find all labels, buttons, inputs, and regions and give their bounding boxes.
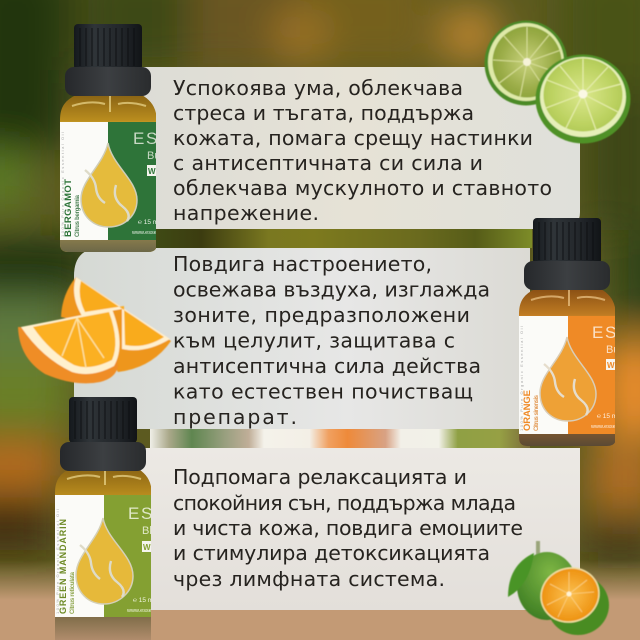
- text block: orange benefits: към целулит, защитава с: [173, 328, 455, 352]
- bottle: orange: E: [592, 323, 603, 342]
- panel: green mandarin text background: [130, 448, 580, 610]
- text block: bergamot benefits: напрежение.: [173, 201, 319, 225]
- text block: orange benefits: освежава въздуха, изглажда: [173, 278, 490, 302]
- text block: green mandarin benefits: [173, 465, 523, 591]
- bottle: green mandarin: E: [128, 504, 139, 523]
- text block: orange benefits: като естествен почистващ: [173, 380, 473, 404]
- text block: bergamot benefits: стреса и тъгата, поддържа: [173, 101, 474, 125]
- text block: bergamot benefits: кожата, помага срещу настинки: [173, 126, 533, 150]
- bottle: orange: ℮ 15 ml: [597, 413, 619, 420]
- text block: orange benefits: зоните, предразположени: [173, 303, 470, 327]
- icon: green mandarin: [508, 541, 609, 635]
- text block: orange benefits: антисептична сила действа: [173, 354, 481, 378]
- panel: bergamot text background: [130, 67, 580, 229]
- text block: orange benefits: препарат.: [173, 405, 297, 429]
- text block: bergamot benefits: с антисептичната си сила и: [173, 151, 483, 175]
- bottle: bergamot: S: [146, 129, 157, 148]
- bottle: orange: Bu: [606, 344, 619, 356]
- bottle: bergamot: www.essence: [131, 230, 166, 236]
- bottle: orange: Citrus sinensis: [534, 394, 540, 431]
- bottle: bergamot: [60, 24, 166, 252]
- bottle: bergamot: ℮ 15 ml: [138, 219, 160, 226]
- bottle: green mandarin: GREEN MANDARIN: [58, 519, 68, 614]
- text block: green mandarin benefits: спокойния сън, поддържа млада: [173, 491, 516, 515]
- text block: green mandarin benefits: и чиста кожа, повдига емоциите: [173, 516, 523, 540]
- bottle: orange: S: [605, 323, 616, 342]
- bottle: green mandarin: Bl: [142, 525, 152, 537]
- bottle: bergamot: Bu: [147, 150, 160, 162]
- bottle: green mandarin: S: [141, 504, 152, 523]
- bottle: bergamot: 100% Pure Organic Essential Oil: [60, 132, 65, 237]
- bottle: green mandarin: W: [143, 543, 151, 552]
- icon: bergamot slices: [484, 20, 630, 144]
- bottle: orange: [519, 218, 625, 446]
- bottle: green mandarin: Citrus reticulata: [70, 571, 76, 614]
- text block: orange benefits: Повдига настроението,: [173, 252, 432, 276]
- text block: bergamot benefits: [173, 76, 552, 225]
- bottle: green mandarin: www.essence: [126, 608, 161, 614]
- icon: orange wedges: [18, 277, 171, 383]
- text block: green mandarin benefits: и стимулира детоксикацията: [173, 541, 490, 565]
- text block: bergamot benefits: Успокоява ума, облекчава: [173, 76, 463, 100]
- text block: orange benefits: [173, 252, 490, 429]
- bottle: orange: W: [607, 361, 615, 370]
- bottle: green mandarin: 100% Pure Organic Essential Oil: [55, 509, 60, 614]
- bottle: bergamot: W: [148, 167, 156, 176]
- panel: orange text background: [74, 248, 530, 429]
- olive strip between upper panels: [156, 229, 532, 248]
- text block: green mandarin benefits: чрез лимфната система.: [173, 567, 445, 591]
- dappled strip between lower panels: [150, 429, 530, 448]
- text block: bergamot benefits: облекчава мускулното и ставното: [173, 176, 552, 200]
- bottle: green mandarin: [55, 397, 161, 640]
- bottle: green mandarin: ℮ 15 ml: [133, 597, 155, 604]
- bottle: bergamot: BERGAMOT: [63, 179, 74, 237]
- text block: green mandarin benefits: Подпомага релаксацията и: [173, 465, 467, 489]
- bottle: orange: 100% Pure Organic Essential Oil: [519, 326, 524, 431]
- bottle: bergamot: E: [133, 129, 144, 148]
- bottle: orange: ORANGE: [522, 390, 533, 431]
- bottle: orange: www.essence: [590, 424, 625, 430]
- bottle: bergamot: Citrus bergamia: [75, 194, 81, 237]
